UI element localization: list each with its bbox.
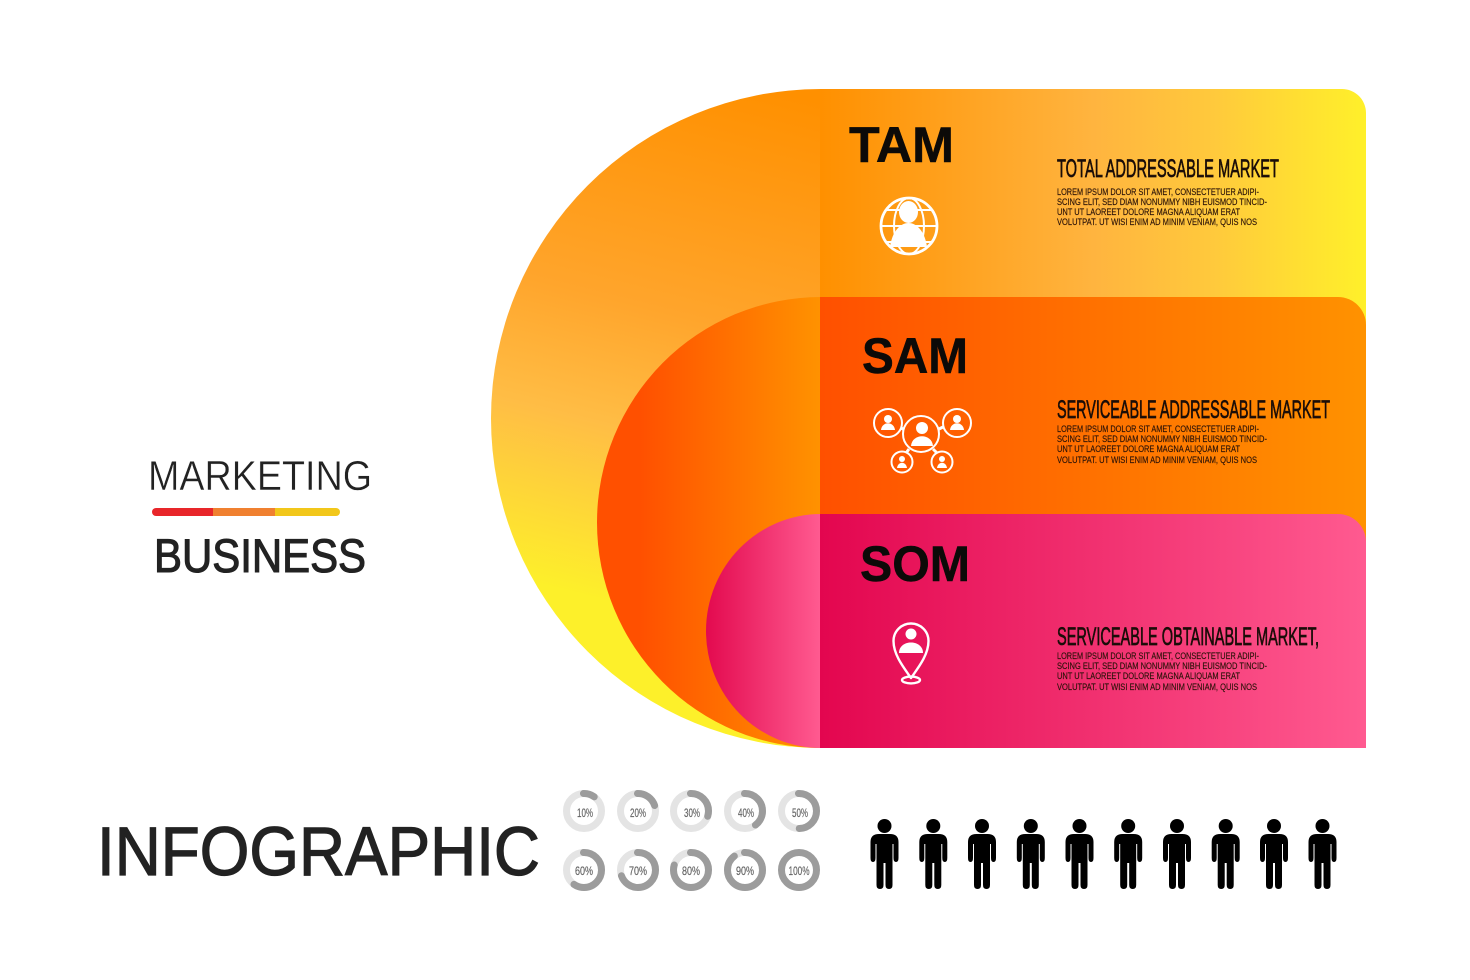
panel: SOM band (706, 514, 1366, 748)
progress rings: 10% to 100%: 50% (792, 806, 808, 820)
text block: SAM description: UNT UT LAOREET DOLORE MAGNA ALIQUAM ERAT (1057, 444, 1240, 454)
icon row: ten people (870, 819, 1336, 889)
text block: SAM description: VOLUTPAT. UT WISI ENIM AD MINIM VENIAM, QUIS NOS (1057, 455, 1257, 465)
progress rings: 10% to 100%: 40% (738, 806, 754, 820)
text block: TAM description: LOREM IPSUM DOLOR SIT AMET, CONSECTETUER ADIPI- (1057, 187, 1259, 197)
text block: SOM description: SCING ELIT, SED DIAM NONUMMY NIBH EUISMOD TINCID- (1057, 661, 1267, 671)
progress rings: 10% to 100%: 30% (684, 806, 700, 820)
progress rings: 10% to 100%: 20% (630, 806, 646, 820)
icon: location pin with person (894, 624, 928, 683)
text block: SOM description: LOREM IPSUM DOLOR SIT AMET, CONSECTETUER ADIPI- (1057, 651, 1259, 661)
panel: TAM band (491, 89, 1366, 748)
text block: TAM description: SCING ELIT, SED DIAM NONUMMY NIBH EUISMOD TINCID- (1057, 197, 1267, 207)
heading: business: BUSINESS (154, 529, 366, 582)
three-colour divider bar (152, 508, 340, 516)
heading: TAM: TAM (849, 117, 954, 173)
heading: marketing: MARKETING (148, 452, 372, 499)
progress rings: 10% to 100%: 80% (682, 864, 700, 878)
text block: TAM description: TOTAL ADDRESSABLE MARKET (1057, 155, 1279, 183)
progress rings: 10% to 100%: 60% (575, 864, 593, 878)
progress rings: 10% to 100% (566, 794, 816, 888)
text block: SOM description (1057, 623, 1319, 692)
text block: SAM description (1057, 396, 1330, 465)
progress rings: 10% to 100%: 70% (629, 864, 647, 878)
text block: SAM description: LOREM IPSUM DOLOR SIT AMET, CONSECTETUER ADIPI- (1057, 424, 1259, 434)
heading: infographic: INFOGRAPHIC (97, 813, 540, 890)
progress rings: 10% to 100%: 10% (577, 806, 593, 820)
text block: SOM description: UNT UT LAOREET DOLORE MAGNA ALIQUAM ERAT (1057, 671, 1240, 681)
heading: SAM: SAM (862, 328, 968, 384)
text block: TAM description (1057, 155, 1279, 227)
heading: SOM: SOM (860, 536, 970, 592)
icon: globe with person (881, 198, 937, 254)
icon: people network (874, 409, 971, 472)
text block: SAM description: SCING ELIT, SED DIAM NONUMMY NIBH EUISMOD TINCID- (1057, 434, 1267, 444)
text block: SOM description: VOLUTPAT. UT WISI ENIM AD MINIM VENIAM, QUIS NOS (1057, 682, 1257, 692)
progress rings: 10% to 100%: 100% (788, 864, 810, 878)
text block: TAM description: UNT UT LAOREET DOLORE MAGNA ALIQUAM ERAT (1057, 207, 1240, 217)
progress rings: 10% to 100%: 90% (736, 864, 754, 878)
panel: SAM band (597, 297, 1366, 748)
text block: TAM description: VOLUTPAT. UT WISI ENIM AD MINIM VENIAM, QUIS NOS (1057, 217, 1257, 227)
